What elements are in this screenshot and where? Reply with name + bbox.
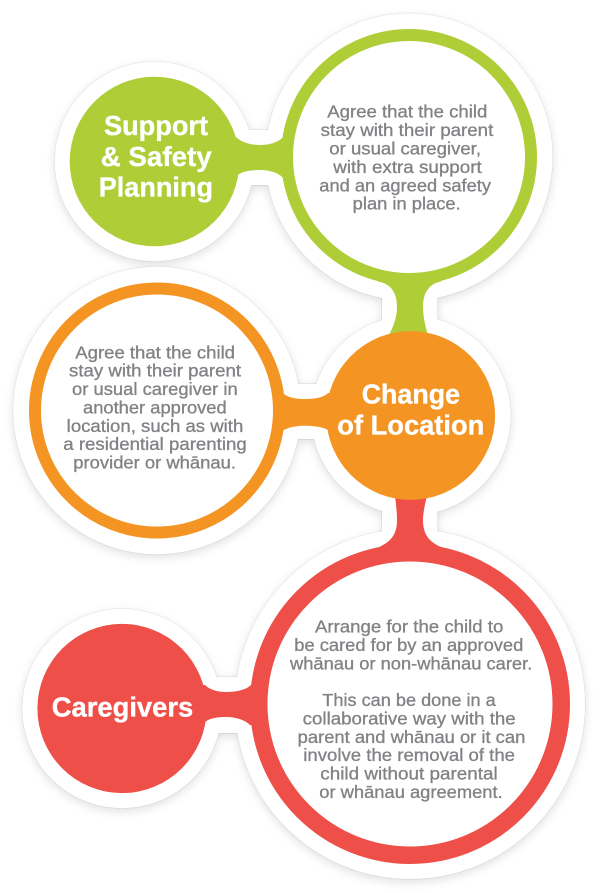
body text: support and safety planning: with extra support (332, 157, 482, 177)
green ring (287, 35, 531, 279)
panel: change of location (35, 288, 495, 532)
heading: support and safety planning: Planning (99, 172, 213, 203)
heading: support and safety planning (99, 110, 213, 203)
heading: change of location: of Location (337, 409, 484, 440)
panel: support and safety planning (70, 35, 531, 335)
body text: caregivers: collaborative way with the (303, 708, 516, 728)
body text: support and safety planning: or usual caregiver, (329, 139, 481, 159)
body text: change of location: Agree that the child (75, 342, 235, 362)
body text: caregivers: parent and whānau or it can (298, 727, 525, 747)
orange ring (35, 288, 279, 532)
body text: caregivers: whānau or non-whānau carer. (289, 653, 532, 673)
body text: support and safety planning: Agree that the child (327, 102, 487, 122)
heading: change of location (337, 378, 484, 440)
connector: red horizontal (195, 685, 258, 725)
body text: caregivers: This can be done in a (322, 690, 496, 710)
connector: green vertical (378, 276, 441, 335)
heading: support and safety planning: Support (104, 110, 208, 141)
connector: red vertical (379, 495, 441, 552)
connector: green horizontal (225, 137, 290, 178)
body text: change of location: stay with their parent (69, 361, 241, 381)
body text: change of location: a residential parenting (63, 434, 247, 454)
body text: change of location: another approved (83, 397, 227, 417)
body text: caregivers: involve the removal of the (303, 745, 515, 765)
heading: caregivers: Caregivers (52, 692, 193, 723)
red filled circle (37, 624, 207, 793)
panel: caregivers (37, 495, 561, 855)
body text: change of location: location, such as with (67, 416, 243, 436)
body text: caregivers (289, 617, 532, 802)
connector: orange horizontal (278, 393, 340, 430)
body text: change of location: provider or whānau. (73, 453, 236, 473)
heading: support and safety planning: & Safety (101, 141, 212, 172)
body text: caregivers: or whānau agreement. (319, 782, 503, 802)
body text: caregivers: child without parental (320, 764, 498, 784)
body text: caregivers: be cared for by an approved (294, 635, 523, 655)
heading: change of location: Change (362, 378, 460, 409)
body text: change of location (63, 342, 247, 473)
orange filled circle (326, 331, 495, 500)
body text: change of location: or usual caregiver in (72, 379, 238, 399)
body text: support and safety planning: stay with their parent (321, 120, 493, 140)
red ring (259, 553, 561, 855)
green filled circle (70, 77, 239, 246)
body text: caregivers: Arrange for the child to (315, 617, 503, 637)
body text: support and safety planning (319, 102, 493, 214)
body text: support and safety planning: and an agreed safety (319, 175, 491, 195)
body text: support and safety planning: plan in place. (353, 194, 461, 214)
